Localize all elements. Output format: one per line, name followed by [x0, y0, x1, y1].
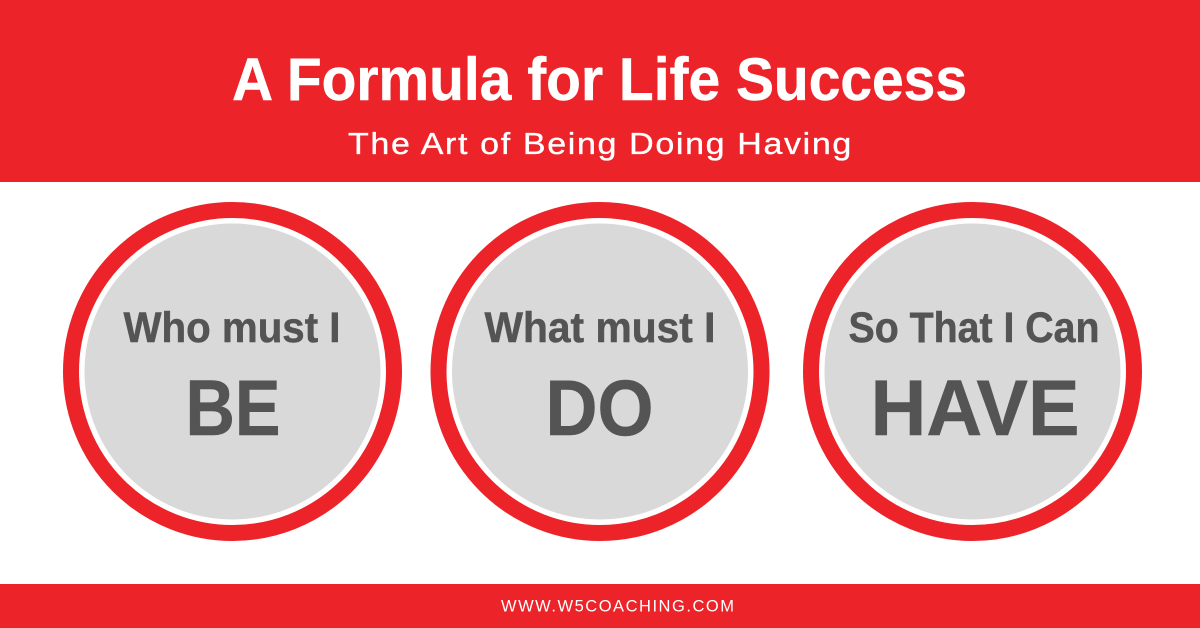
question: so that I can: So That I Can — [848, 305, 1100, 352]
title: A Formula for Life Success — [232, 46, 967, 113]
keyword: BE: BE — [186, 363, 280, 452]
panel: HAVE circle — [811, 210, 1134, 533]
keyword: HAVE: HAVE — [870, 363, 1080, 452]
question: who must I: Who must I — [124, 305, 340, 352]
panel: DO circle — [438, 210, 762, 533]
question: what must I: What must I — [484, 305, 716, 352]
keyword: DO: DO — [546, 363, 654, 452]
subtitle: The Art of Being Doing Having — [348, 126, 853, 161]
panel: BE circle — [71, 210, 394, 533]
website url: WWW.W5COACHING.COM — [501, 598, 734, 616]
header banner — [0, 0, 1200, 182]
footer banner — [0, 584, 1200, 628]
